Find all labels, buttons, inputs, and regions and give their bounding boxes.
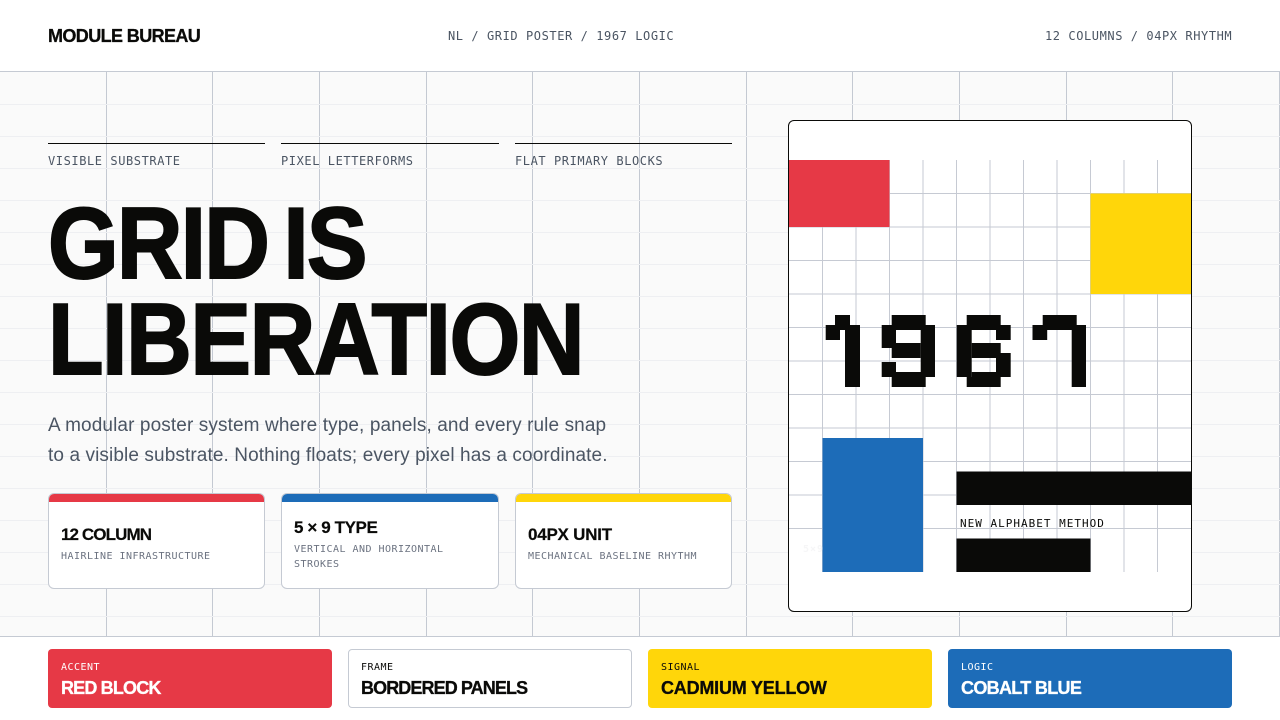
card title: 5 × 9 TYPE xyxy=(294,518,377,537)
pixel numerals 1967 xyxy=(826,315,1086,387)
card caption: HAIRLINE INFRASTRUCTURE xyxy=(61,551,211,562)
swatch: cobalt blue xyxy=(948,649,1232,708)
faint ghost label: 5×9 xyxy=(803,544,824,555)
swatch name: BORDERED PANELS xyxy=(361,678,527,698)
main headline xyxy=(48,188,583,396)
swatch: red block xyxy=(48,649,332,708)
card title: 04PX UNIT xyxy=(528,525,612,544)
swatch label: FRAME xyxy=(361,662,394,673)
swatch name: CADMIUM YELLOW xyxy=(661,678,827,698)
swatch label: LOGIC xyxy=(961,662,994,673)
info card: 5 x 9 type xyxy=(281,493,499,589)
blue accent bar xyxy=(282,494,498,502)
yellow accent bar xyxy=(516,494,731,502)
top rule label: flat primary blocks: FLAT PRIMARY BLOCKS xyxy=(515,154,663,168)
top rule label: visible substrate: VISIBLE SUBSTRATE xyxy=(48,154,181,168)
black bar lower xyxy=(956,538,1090,572)
black bar upper xyxy=(956,472,1191,505)
blue block xyxy=(822,438,923,572)
main headline: LIBERATION xyxy=(48,284,583,396)
swatch label: SIGNAL xyxy=(661,662,700,673)
swatch name: RED BLOCK xyxy=(61,678,161,698)
top rule label: flat primary blocks xyxy=(515,143,732,172)
yellow block xyxy=(1090,194,1191,294)
header bar xyxy=(0,0,1280,72)
poster caption: NEW ALPHABET METHOD xyxy=(960,517,1105,530)
card caption: VERTICAL AND HORIZONTAL xyxy=(294,544,444,555)
intro paragraph: to a visible substrate. Nothing floats; every pixel has a coordinate. xyxy=(48,445,608,466)
card caption: MECHANICAL BASELINE RHYTHM xyxy=(528,551,697,562)
top rule label: pixel letterforms xyxy=(281,143,499,172)
top rule label: pixel letterforms: PIXEL LETTERFORMS xyxy=(281,154,414,168)
red block xyxy=(789,160,890,227)
swatch name: COBALT BLUE xyxy=(961,678,1081,698)
header right label: 12 COLUMNS / 04PX RHYTHM xyxy=(1045,29,1232,43)
red accent bar xyxy=(49,494,264,502)
brand name: MODULE BUREAU xyxy=(48,26,200,46)
info card: 04px unit xyxy=(515,493,732,589)
card caption: STROKES xyxy=(294,559,340,570)
info card: 12 column xyxy=(48,493,265,589)
card caption xyxy=(294,544,444,570)
main substrate with visible grid xyxy=(0,72,1280,637)
intro paragraph xyxy=(48,415,608,466)
swatch: cadmium yellow xyxy=(648,649,932,708)
intro paragraph: A modular poster system where type, panels, and every rule snap xyxy=(48,415,606,436)
poster panel xyxy=(788,120,1192,612)
swatch label: ACCENT xyxy=(61,662,100,673)
card title: 12 COLUMN xyxy=(61,525,151,544)
top rule label: visible substrate xyxy=(48,143,265,172)
main headline: GRID IS xyxy=(48,188,366,300)
swatch: bordered panels xyxy=(348,649,632,708)
header centre label: NL / GRID POSTER / 1967 LOGIC xyxy=(448,29,674,43)
